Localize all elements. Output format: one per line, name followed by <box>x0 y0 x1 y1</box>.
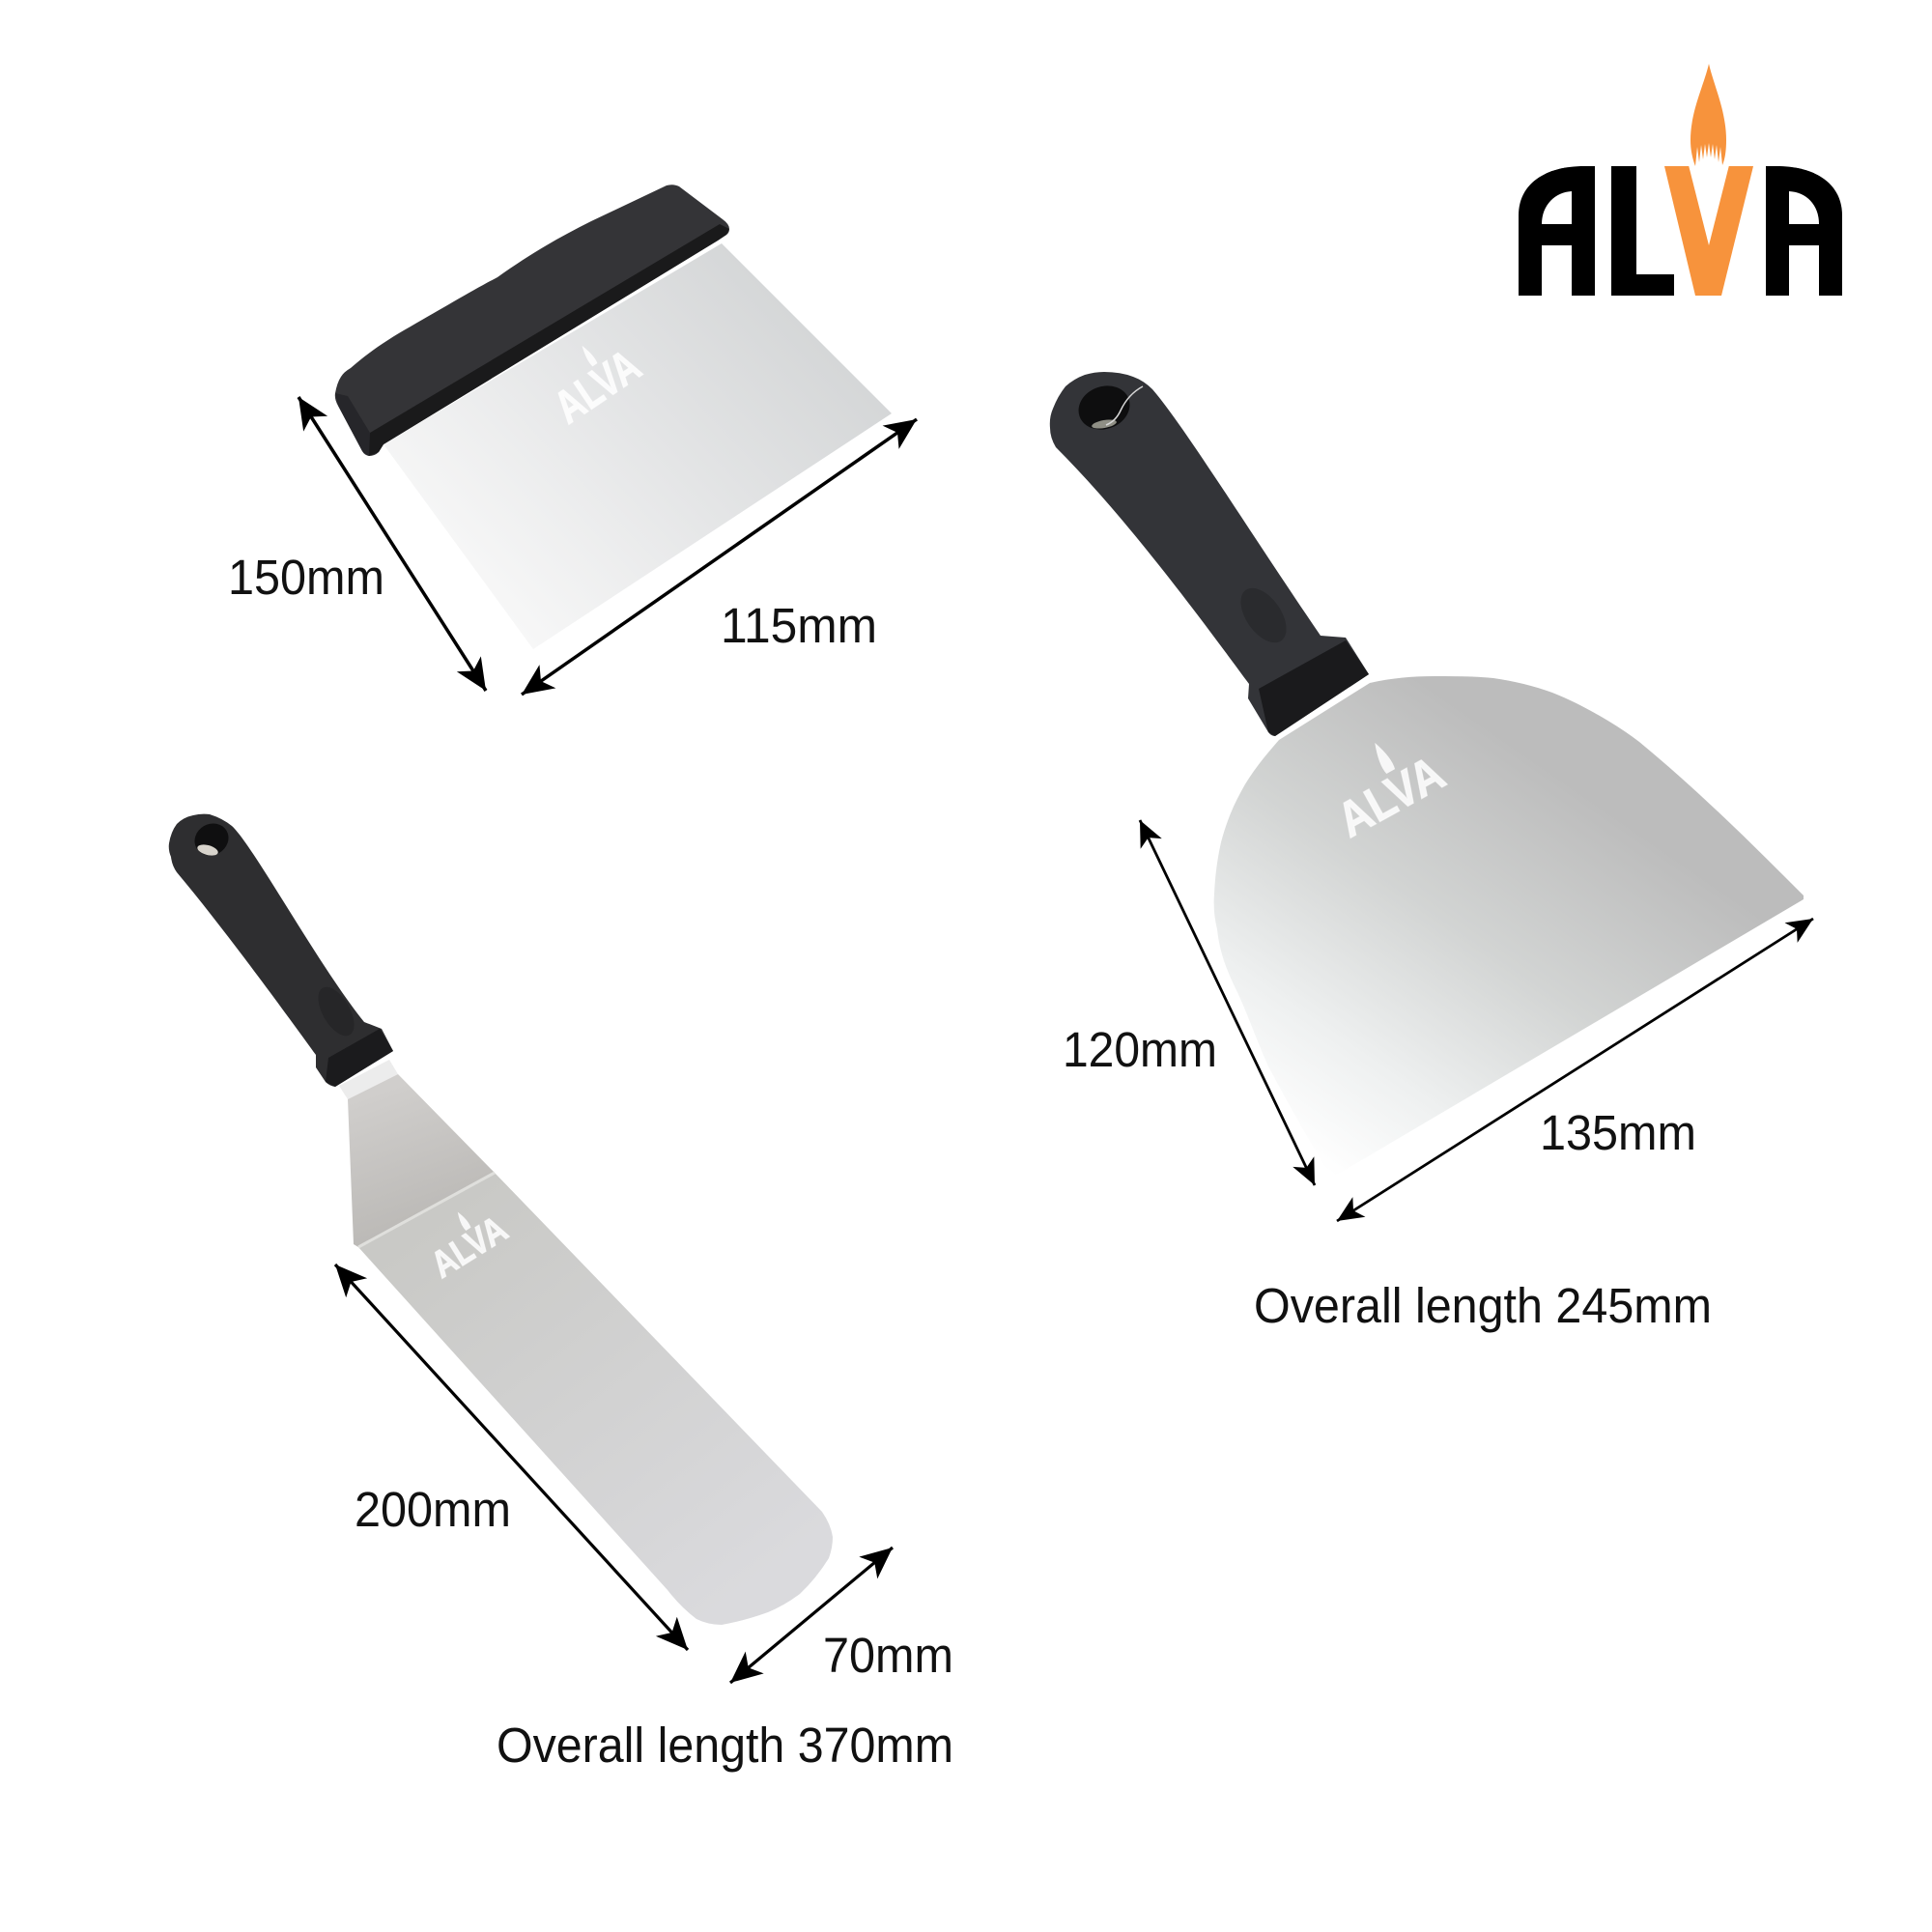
dimension label: 70mm: 70mm <box>823 1628 953 1683</box>
wide spatula handle <box>1050 372 1369 736</box>
long spatula fold highlight <box>358 1173 495 1247</box>
scraper watermark: ALVA <box>546 340 650 434</box>
infographic canvas <box>168 64 1842 1772</box>
logo: ALVA: V <box>1664 126 1753 336</box>
scraper handle lower band <box>362 224 729 456</box>
dimension arrow: long spatula 70mm <box>730 1548 893 1683</box>
caption: overall length 370mm: Overall length 370mm <box>497 1718 953 1773</box>
wide spatula collar <box>1259 640 1369 736</box>
dimension label: 120mm: 120mm <box>1063 1022 1217 1077</box>
dimension label: 135mm: 135mm <box>1540 1105 1696 1160</box>
wide spatula watermark: ALVA <box>1328 745 1454 848</box>
product: wide spatula <box>1050 372 1804 1178</box>
long spatula neck <box>339 1060 398 1099</box>
scraper blade <box>384 243 892 649</box>
dimension arrow: wide spatula 135mm <box>1337 919 1813 1221</box>
dimension arrow: wide spatula 120mm <box>1140 820 1315 1185</box>
dimension arrow: scraper 150mm <box>298 397 486 691</box>
wide spatula wire <box>1106 386 1143 425</box>
long spatula handle <box>169 814 393 1087</box>
scraper handle <box>335 185 729 456</box>
wide spatula blade <box>1214 676 1804 1178</box>
long spatula watermark: ALVA <box>424 1208 515 1287</box>
logo: ALVA <box>1519 64 1842 296</box>
long spatula upper blade <box>348 1074 495 1247</box>
wide spatula hanging hole <box>1072 379 1136 437</box>
wide spatula hole highlight <box>1092 418 1117 430</box>
wide spatula thumb grip <box>1232 580 1295 651</box>
dimension label: 200mm: 200mm <box>355 1482 511 1537</box>
product: long spatula <box>169 814 833 1625</box>
dimension arrow: long spatula 200mm <box>335 1264 688 1650</box>
long spatula thumb grip <box>311 981 361 1041</box>
logo: ALVA: A <box>1766 126 1842 336</box>
caption: overall length 245mm: Overall length 245mm <box>1254 1278 1712 1333</box>
product: dough scraper <box>335 185 892 649</box>
scraper handle end cap <box>335 393 370 456</box>
icon: logo flame <box>1690 64 1726 166</box>
dimension label: 150mm: 150mm <box>228 550 384 605</box>
logo: ALVA: A <box>1519 126 1595 336</box>
long spatula hole highlight <box>196 842 219 858</box>
dimension label: 115mm: 115mm <box>721 598 877 653</box>
dimension arrow: scraper 115mm <box>522 419 917 695</box>
long spatula collar <box>326 1029 393 1087</box>
logo: ALVA: L <box>1599 126 1681 336</box>
long spatula hanging hole <box>188 817 235 862</box>
long spatula lower blade <box>358 1173 833 1625</box>
